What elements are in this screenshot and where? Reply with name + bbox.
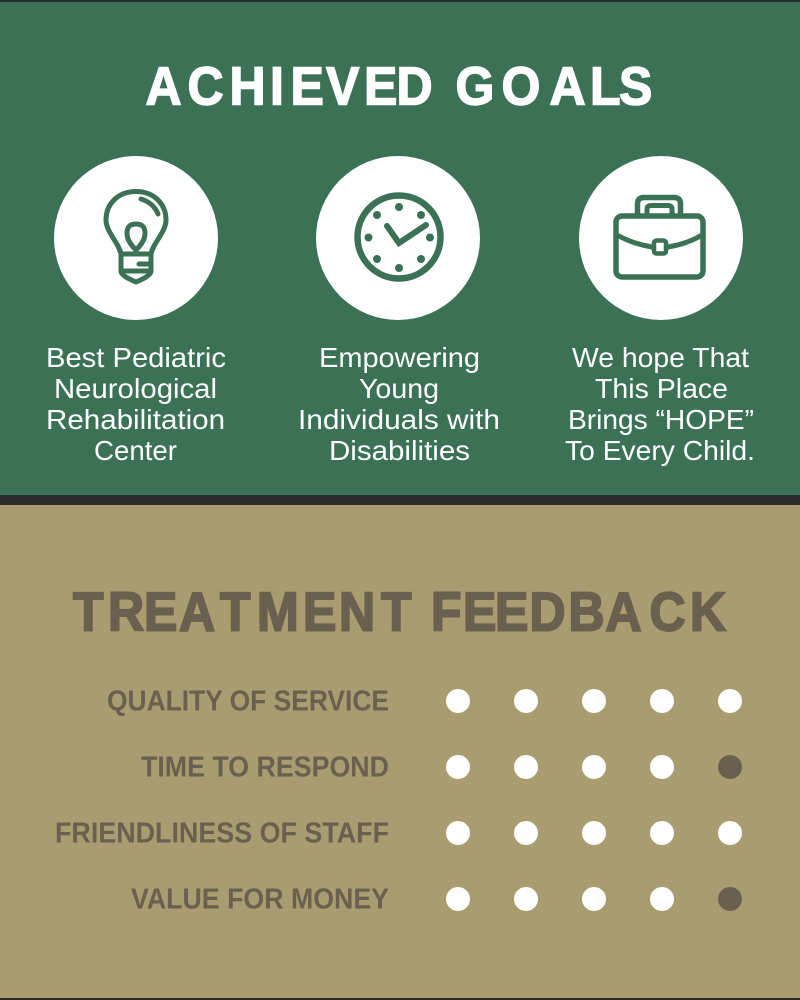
text: we hope: We hope That [572,342,749,373]
panel: treatment feedback [0,505,800,998]
row: value for money [131,884,742,916]
text: we hope: Brings “HOPE” [568,404,754,435]
icon: light bulb [54,156,218,320]
row: quality of service [107,686,742,718]
heading: treatment feedback: TREATMENT [73,581,412,643]
title: achieved goals [146,56,652,116]
row: value for money: VALUE FOR MONEY [131,884,389,916]
text: we hope: This Place [595,373,728,404]
title: achieved goals: ACHIEVED [146,56,433,116]
text: best pediatric [46,342,226,466]
heading: treatment feedback [73,581,726,643]
icon: briefcase [579,156,743,320]
text: we hope: To Every Child. [565,435,755,466]
text: empowering young individuals: Empowering [319,342,480,373]
title: achieved goals: GOALS [456,56,652,116]
row: quality of service: QUALITY OF SERVICE [107,686,389,718]
text: best pediatric: Center [94,435,177,466]
text: empowering young individuals: Individuals with [298,404,500,435]
icon: clock [316,156,480,320]
text: best pediatric: Best Pediatric [46,342,226,373]
text: empowering young individuals: Young [359,373,439,404]
text: empowering young individuals: Disabilities [329,435,470,466]
text: empowering young individuals [298,342,500,466]
panel: achieved goals [0,2,800,495]
heading: treatment feedback: FEEDBACK [431,581,726,643]
row: time to respond [141,752,742,784]
row: time to respond: TIME TO RESPOND [141,752,389,784]
row: friendliness of staff: FRIENDLINESS OF STAFF [55,818,389,850]
text: we hope [565,342,755,466]
text: best pediatric: Rehabilitation [46,404,225,435]
row: friendliness of staff [55,818,742,850]
text: best pediatric: Neurological [54,373,217,404]
